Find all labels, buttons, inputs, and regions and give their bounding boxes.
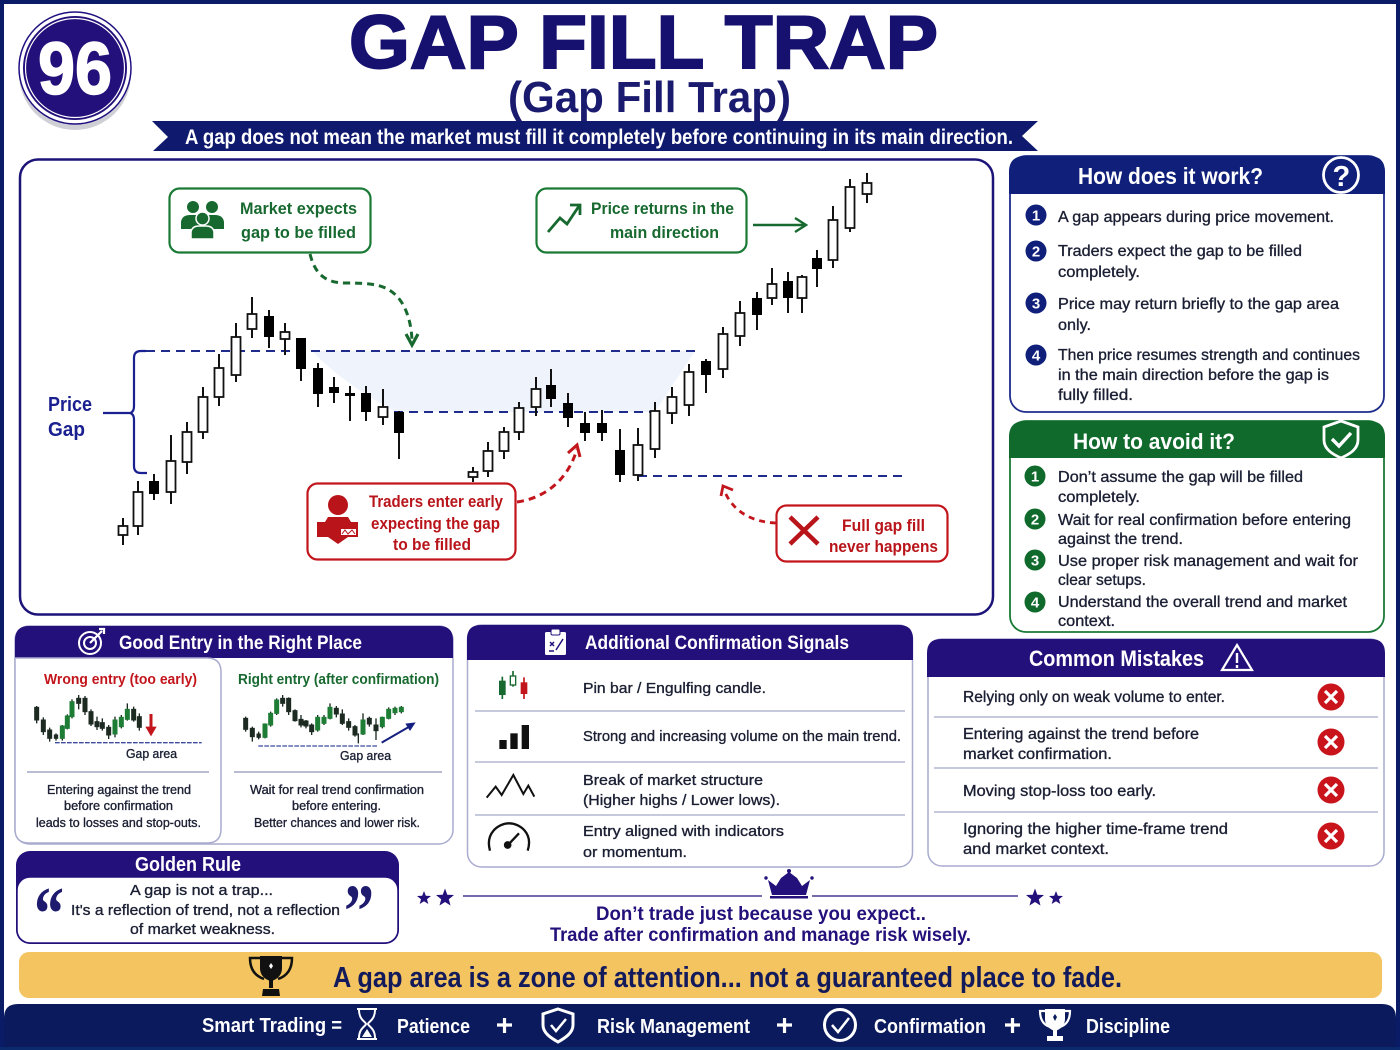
quote marks: “	[34, 872, 64, 956]
badge: number 96: 96	[38, 27, 112, 110]
plus signs	[497, 1018, 1020, 1033]
panel: good entry in the right place: Good Entry in the Right Place	[119, 633, 362, 654]
callout: price returns in the main direction: main direction	[610, 223, 719, 242]
numbered tips: Understand the overall trend and market	[1058, 594, 1348, 611]
banner: gap area is a zone of attention	[19, 952, 1382, 998]
quote text: A gap is not a trap...	[130, 882, 273, 899]
icon: crown	[764, 869, 814, 898]
sub-panel: wrong entry: before confirmation	[64, 798, 173, 813]
divider with crown and stars	[417, 869, 1063, 906]
sub-panel: right entry	[234, 671, 442, 830]
numbered tips: 2	[1031, 512, 1039, 528]
icon: clipboard	[545, 629, 566, 655]
sub-panel: right entry: Gap area	[340, 748, 392, 763]
gap zone shading	[312, 351, 695, 412]
panel: how to avoid it: How to avoid it?	[1073, 429, 1235, 454]
footer bar: smart trading formula: Discipline	[1086, 1016, 1170, 1038]
sub-panel: wrong entry: Wrong entry (too early)	[44, 671, 197, 688]
icon: shield	[543, 1009, 573, 1042]
icon: question mark: ?	[1332, 161, 1350, 193]
icon: candles	[499, 671, 527, 699]
callout: full gap fill never happens: Full gap fill	[842, 517, 925, 535]
mini chart: right entry	[244, 695, 416, 746]
panel: golden rule: Golden Rule	[135, 854, 241, 876]
text: indicators: or momentum.	[583, 844, 687, 861]
sub-panel: right entry: Right entry (after confirmation)	[238, 671, 439, 688]
panel: how does it work	[1009, 156, 1385, 412]
icon: question mark	[1324, 158, 1358, 193]
numbered tips: context.	[1058, 613, 1115, 630]
numbered steps: Traders expect the gap to be filled	[1058, 243, 1302, 260]
quote text: It's a reflection of trend, not a reflection	[71, 902, 340, 919]
sub-panel: wrong entry: Entering against the trend	[47, 782, 191, 797]
numbered steps: Price may return briefly to the gap area	[1058, 296, 1339, 313]
quote marks	[34, 870, 374, 956]
numbered tips: Use proper risk management and wait for	[1058, 553, 1359, 570]
callout: traders enter early: Traders enter early	[369, 493, 504, 511]
icon: shield check	[1324, 421, 1358, 458]
label: price gap	[48, 394, 92, 441]
sub-panel: wrong entry: Gap area	[126, 746, 178, 761]
mini chart: wrong entry	[35, 695, 202, 743]
icon: market structure zigzag	[487, 775, 534, 798]
footer bar: smart trading formula: Smart Trading =	[202, 1015, 342, 1037]
numbered steps: fully filled.	[1058, 387, 1133, 404]
numbered steps: completely.	[1058, 264, 1140, 281]
numbered tips: Wait for real confirmation before entering	[1058, 512, 1351, 529]
callout: market expects gap to be filled: gap to be filled	[241, 223, 356, 242]
ribbon: key message: A gap does not mean the market must fill it completely before continuing in its main direction.	[185, 126, 1013, 149]
label: price gap: Gap	[48, 419, 85, 441]
numbered steps: only.	[1058, 317, 1091, 334]
icon: check circle	[824, 1010, 856, 1040]
icon: trophy white	[1040, 1009, 1070, 1041]
sub-panel: right entry: before entering.	[292, 798, 381, 813]
mistakes list: Moving stop-loss too early.	[963, 783, 1156, 800]
callout: market expects gap to be filled: Market expects	[240, 199, 357, 218]
footer bar: smart trading formula: Confirmation	[874, 1016, 986, 1038]
panel: how to avoid it	[1009, 421, 1385, 632]
quote text	[71, 882, 340, 938]
mistakes list: Entering against the trend before	[963, 726, 1199, 743]
icon: right stars	[1026, 888, 1063, 906]
numbered steps: in the main direction before the gap is	[1058, 367, 1329, 384]
quote marks: ”	[344, 870, 374, 954]
numbered tips: Don’t assume the gap will be filled	[1058, 469, 1303, 486]
mistakes list	[963, 689, 1228, 858]
callout: full gap fill never happens: never happens	[829, 538, 938, 556]
sub-panel: right entry: Wait for real trend confirmation	[250, 782, 424, 797]
quote text: of market weakness.	[130, 921, 275, 938]
callout: traders enter early: to be filled	[393, 536, 471, 554]
title: GAP FILL TRAP	[349, 0, 938, 84]
price gap bracket	[103, 351, 147, 473]
numbered steps: 2	[1032, 244, 1040, 260]
sub-panel: wrong entry: leads to losses and stop-outs.	[36, 815, 201, 830]
mistakes list: Ignoring the higher time-frame trend	[963, 821, 1228, 838]
numbered tips: against the trend.	[1058, 531, 1183, 548]
mistakes list: market confirmation.	[963, 746, 1112, 763]
sub-panel: wrong entry	[15, 658, 221, 843]
callout: traders enter early: expecting the gap	[371, 515, 500, 533]
numbered tips: completely.	[1058, 489, 1140, 506]
text: volume: Strong and increasing volume on the main trend.	[583, 728, 901, 745]
arrow: expectation points at gap	[310, 254, 418, 345]
numbered tips: clear setups.	[1058, 572, 1146, 589]
icon: target	[79, 629, 104, 654]
arrow: gap low never reached	[721, 486, 776, 523]
panel: common mistakes: Common Mistakes	[1029, 646, 1204, 671]
callout: price returns in the main direction	[536, 188, 746, 252]
numbered tips	[1024, 466, 1359, 630]
banner: gap area is a zone of attention: A gap area is a zone of attention... not a guaranteed place to fade.	[333, 962, 1122, 994]
callout: full gap fill never happens	[776, 506, 948, 562]
numbered steps: 3	[1032, 296, 1040, 312]
ribbon: key message	[152, 121, 1038, 151]
closing advice text: Don’t trade just because you expect..	[596, 904, 926, 925]
icon: gauge	[489, 823, 529, 851]
footer bar: smart trading formula	[0, 1004, 1400, 1050]
numbered tips: 4	[1031, 594, 1040, 612]
callout: price returns in the main direction: Price returns in the	[591, 199, 734, 218]
icon: warning triangle	[1222, 645, 1252, 670]
numbered steps: A gap appears during price movement.	[1058, 209, 1334, 226]
subtitle: (Gap Fill Trap)	[508, 73, 791, 122]
footer bar: smart trading formula: Risk Management	[597, 1016, 750, 1038]
icon: hourglass	[357, 1009, 377, 1039]
sub-panel: right entry: Better chances and lower risk.	[254, 815, 420, 830]
mistakes list: Relying only on weak volume to enter.	[963, 689, 1225, 706]
text: market structure	[583, 772, 780, 809]
panel: additional confirmation signals: Additional Confirmation Signals	[585, 633, 849, 654]
callout: traders enter early	[308, 484, 516, 560]
text: pin bar: Pin bar / Engulfing candle.	[583, 680, 766, 697]
panel: how does it work: How does it work?	[1078, 163, 1263, 189]
panel: good entry in the right place	[15, 626, 453, 844]
label: price gap: Price	[48, 394, 92, 416]
numbered steps: 4	[1032, 348, 1041, 364]
footer bar: smart trading formula: Patience	[397, 1016, 470, 1038]
numbered tips: 3	[1031, 552, 1039, 570]
arrow: early entry	[517, 445, 580, 502]
closing advice text	[550, 904, 971, 946]
icon: volume bars	[499, 725, 529, 749]
icons: red x marks	[1318, 684, 1344, 850]
panel: common mistakes	[927, 639, 1385, 866]
text: market structure: Break of market structure	[583, 772, 763, 789]
panel: additional confirmation signals	[467, 625, 913, 867]
numbered steps: 1	[1032, 208, 1040, 224]
mistakes list: and market context.	[963, 841, 1109, 858]
text: market structure: (Higher highs / Lower lows).	[583, 792, 780, 809]
numbered steps	[1026, 204, 1360, 404]
candlestick chart	[118, 173, 872, 545]
text: indicators	[583, 823, 784, 861]
closing advice text: Trade after confirmation and manage risk wisely.	[550, 925, 971, 946]
panel: main chart	[20, 160, 993, 614]
gap level lines	[146, 351, 902, 476]
numbered tips: 1	[1031, 468, 1039, 486]
numbered steps: Then price resumes strength and continues	[1058, 347, 1360, 364]
icon: trophy	[250, 956, 292, 996]
callout: market expects gap to be filled	[170, 188, 370, 252]
icon: left stars	[417, 888, 454, 906]
text: indicators: Entry aligned with indicators	[583, 823, 784, 840]
badge: number 96	[19, 12, 131, 130]
arrow: main direction	[753, 218, 806, 232]
panel: golden rule	[16, 851, 399, 956]
